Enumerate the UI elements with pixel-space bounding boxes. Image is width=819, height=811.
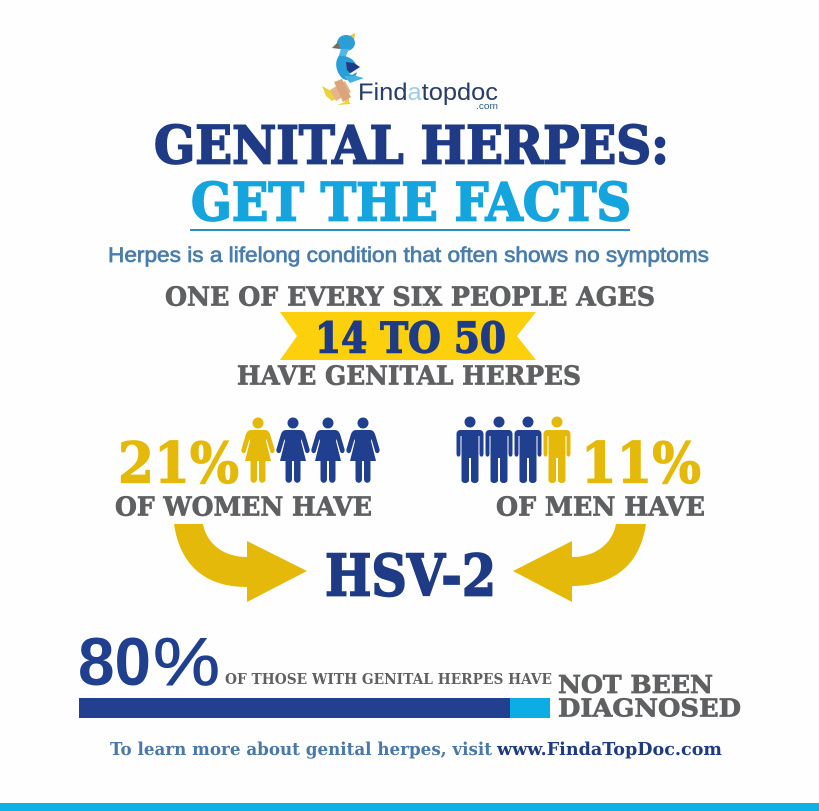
arrow: men to HSV-2	[513, 524, 646, 602]
HSV-2 label: HSV-2	[325, 542, 496, 610]
diagnosed: DIAGNOSED	[558, 694, 741, 722]
footer text: To learn more about genital herpes, visit	[110, 739, 493, 760]
men statistic	[456, 416, 705, 522]
undiagnosed statistic	[78, 624, 741, 722]
statistic line 1: ONE OF EVERY SIX PEOPLE AGES	[165, 282, 655, 312]
title line 1: GENITAL HERPES:	[154, 116, 669, 176]
progress bar	[79, 698, 550, 718]
title	[154, 116, 669, 234]
women statistic	[115, 418, 380, 522]
icon: man 2	[486, 416, 512, 483]
men label: OF MEN HAVE	[496, 492, 705, 522]
icon: woman highlighted	[241, 418, 275, 483]
not been: NOT BEEN	[558, 670, 713, 699]
80 percent sign: %	[153, 624, 220, 700]
icon: woman 3	[311, 418, 345, 483]
icon: man highlighted	[544, 416, 570, 483]
title line 2: GET THE FACTS	[191, 172, 631, 234]
bottom band	[0, 803, 819, 811]
icon: duck mascot	[322, 33, 364, 105]
statistic caption: OF THOSE WITH GENITAL HERPES HAVE	[225, 670, 552, 688]
80 percent number: 80	[78, 624, 151, 700]
men percentage: 11%	[581, 430, 701, 496]
logo wordmark: Findatopdoc	[358, 79, 498, 106]
icon: woman 2	[276, 418, 310, 483]
women label: OF WOMEN HAVE	[115, 492, 372, 522]
icon: woman 4	[346, 418, 380, 483]
logo .com: .com	[476, 101, 498, 111]
arrow: women to HSV-2	[174, 524, 307, 602]
icon: man 3	[514, 416, 542, 483]
footer call to action	[110, 739, 722, 760]
title underline	[190, 229, 630, 231]
statistic: one of every six	[165, 282, 655, 392]
women percentage: 21%	[118, 430, 239, 496]
ribbon banner	[280, 312, 536, 360]
subtitle: Herpes is a lifelong condition that often shows no symptoms	[108, 244, 709, 267]
icon: man 1	[456, 416, 484, 483]
footer url: www.FindaTopDoc.com	[496, 739, 722, 760]
logo: Findatopdoc	[322, 33, 498, 111]
statistic line 2: HAVE GENITAL HERPES	[237, 362, 581, 392]
ribbon text: 14 TO 50	[315, 314, 506, 362]
